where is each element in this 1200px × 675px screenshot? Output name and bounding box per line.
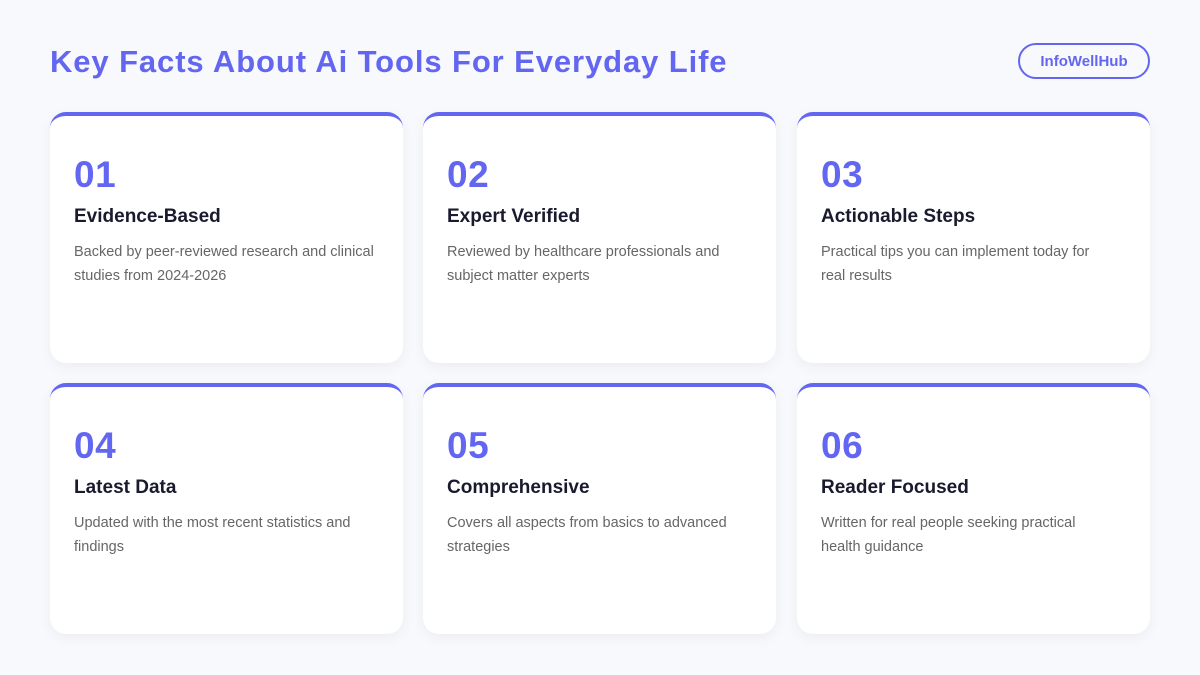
card 05 bbox=[423, 383, 776, 634]
card 01 bbox=[50, 112, 403, 363]
title: Key Facts About Ai Tools For Everyday Life bbox=[50, 44, 727, 79]
card 03 bbox=[797, 112, 1150, 363]
card 03: Practical tips you can implement today for bbox=[821, 244, 1089, 260]
card 06: 06 bbox=[821, 425, 863, 466]
card 05: strategies bbox=[447, 539, 510, 555]
card 05: 05 bbox=[447, 425, 489, 466]
card 01: 01 bbox=[74, 154, 116, 195]
badge: InfoWellHub bbox=[1040, 53, 1128, 70]
badge bbox=[1018, 43, 1150, 79]
card 05: Covers all aspects from basics to advanced bbox=[447, 515, 727, 531]
card 04: Latest Data bbox=[74, 477, 176, 498]
card 06: Reader Focused bbox=[821, 477, 969, 498]
card 03: real results bbox=[821, 268, 892, 284]
card 04 bbox=[50, 383, 403, 634]
card 05: Comprehensive bbox=[447, 477, 590, 498]
card 02: Expert Verified bbox=[447, 206, 580, 227]
card 04: Updated with the most recent statistics and bbox=[74, 515, 350, 531]
card 01: Backed by peer-reviewed research and clinical bbox=[74, 244, 374, 260]
card 06: health guidance bbox=[821, 539, 923, 555]
card 02: 02 bbox=[447, 154, 489, 195]
card 04: 04 bbox=[74, 425, 116, 466]
card 01: Evidence-Based bbox=[74, 206, 221, 227]
card 01: studies from 2024-2026 bbox=[74, 268, 226, 284]
card 03: Actionable Steps bbox=[821, 206, 975, 227]
card 06: Written for real people seeking practical bbox=[821, 515, 1075, 531]
card 04: findings bbox=[74, 539, 124, 555]
card 06 bbox=[797, 383, 1150, 634]
card 02: subject matter experts bbox=[447, 268, 590, 284]
card 02: Reviewed by healthcare professionals and bbox=[447, 244, 719, 260]
card 03: 03 bbox=[821, 154, 863, 195]
card 02 bbox=[423, 112, 776, 363]
